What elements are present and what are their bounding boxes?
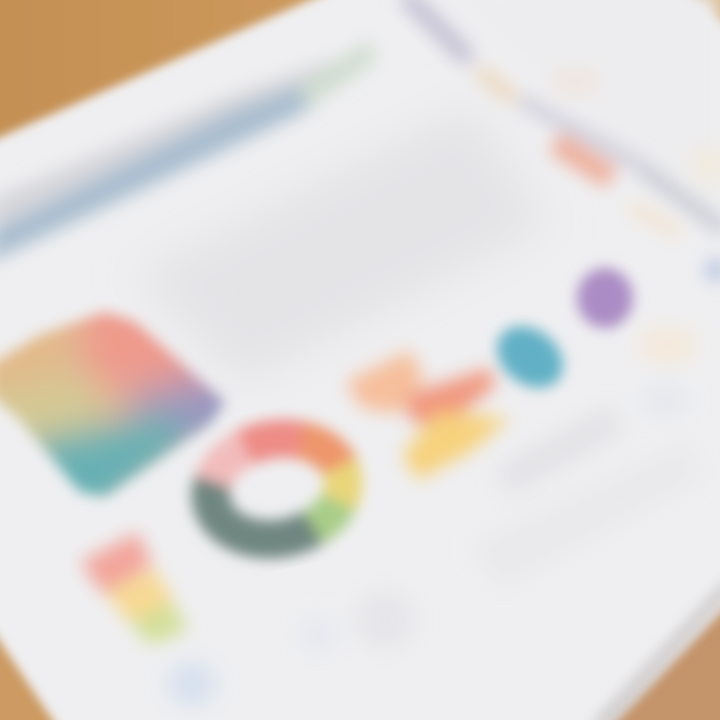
purple blob icon	[577, 268, 633, 328]
faint lower blue icons	[168, 590, 415, 706]
blue blob icon	[485, 314, 575, 400]
faint lower right text block	[470, 386, 700, 590]
wooden table: top right corner	[680, 0, 720, 30]
rainbow diamond panel	[0, 304, 230, 506]
pale cream blob icon	[638, 327, 698, 363]
orange bar shapes	[345, 350, 510, 480]
colored edge strip between the two sheets	[405, 0, 720, 281]
wooden table: bottom right corner	[598, 592, 720, 720]
wooden table: top left corner	[0, 0, 355, 146]
blurred body text block	[135, 105, 550, 385]
second sheet at top right	[440, 0, 720, 210]
small multicolor chart	[80, 532, 188, 645]
faint marks on the second sheet	[551, 70, 720, 183]
wooden table: bottom left corner	[0, 612, 66, 720]
donut chart	[201, 426, 353, 551]
shadow under the main sheet	[590, 575, 720, 720]
header banner	[0, 40, 376, 262]
